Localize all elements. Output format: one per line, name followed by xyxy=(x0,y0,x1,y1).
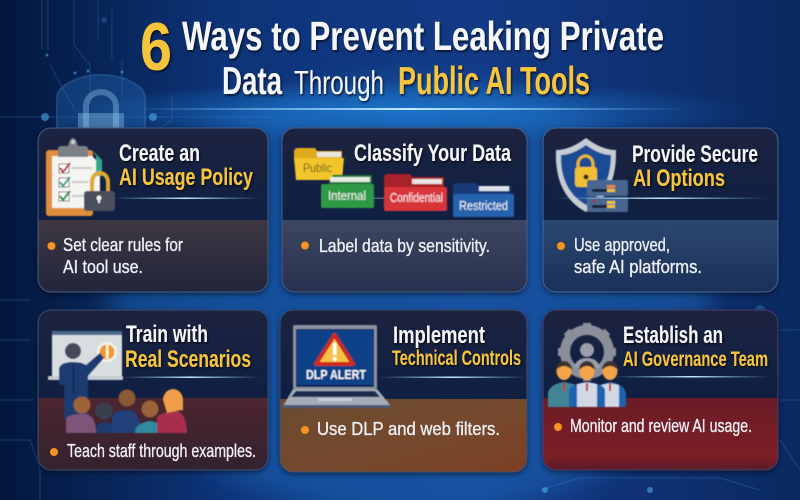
title line 2: Data xyxy=(222,60,282,103)
panel: create an AI usage policy xyxy=(38,128,268,292)
icon: clipboard with padlock xyxy=(46,138,115,216)
icon: yellow public folder: Public xyxy=(303,161,332,175)
heading xyxy=(392,322,521,370)
bullet text: Label data by sensitivity. xyxy=(319,235,490,256)
heading xyxy=(119,140,253,191)
icon: laptop with DLP alert xyxy=(283,325,391,408)
heading: Create an xyxy=(119,140,200,167)
bullet text: Use DLP and web filters. xyxy=(317,418,500,439)
title line 2: Through xyxy=(294,64,384,101)
heading: Train with xyxy=(126,321,208,348)
heading xyxy=(623,322,768,371)
heading: Real Scenarios xyxy=(125,346,251,373)
bullet text xyxy=(48,234,183,277)
panel: provide secure AI options xyxy=(543,128,778,292)
bullet text: Set clear rules for xyxy=(63,234,183,255)
icon: yellow public folder xyxy=(294,148,344,180)
panel: implement technical controls xyxy=(280,310,527,472)
bullet text: safe AI platforms. xyxy=(574,256,702,277)
icon: green internal folder: Internal xyxy=(328,188,366,203)
heading: AI Usage Policy xyxy=(119,164,253,191)
heading: Implement xyxy=(393,322,485,349)
bullet text: Teach staff through examples. xyxy=(67,440,256,461)
heading: Technical Controls xyxy=(392,347,521,370)
icon: red confidential folder xyxy=(384,174,447,211)
icon: green internal folder xyxy=(321,175,374,208)
icon: shield with padlock and servers xyxy=(556,138,628,212)
heading xyxy=(632,141,758,192)
title numeral 6: 6 xyxy=(140,9,172,85)
heading: AI Options xyxy=(633,165,725,192)
icon: laptop with DLP alert: DLP ALERT xyxy=(306,367,366,382)
icon: presenter and audience xyxy=(48,331,187,433)
title line 1: Ways to Prevent Leaking Private xyxy=(182,13,664,59)
icon: gear and team xyxy=(548,323,626,407)
heading xyxy=(125,321,251,373)
bullet text: Use approved, xyxy=(574,234,670,255)
title line 2 xyxy=(222,60,590,103)
icon: red confidential folder: Confidential xyxy=(390,190,443,205)
title line 2: Public AI Tools xyxy=(398,60,590,103)
bullet text: AI tool use. xyxy=(63,256,143,277)
title xyxy=(140,9,664,103)
icon: blue restricted folder: Restricted xyxy=(459,198,508,213)
panel: establish an AI governance team xyxy=(543,310,778,470)
panel: train with real scenarios xyxy=(38,310,268,470)
icon: blue restricted folder xyxy=(453,183,514,217)
heading: Classify Your Data xyxy=(354,140,511,167)
bullet text xyxy=(557,234,702,277)
heading: Establish an xyxy=(623,322,723,349)
panel: classify your data xyxy=(282,128,527,292)
